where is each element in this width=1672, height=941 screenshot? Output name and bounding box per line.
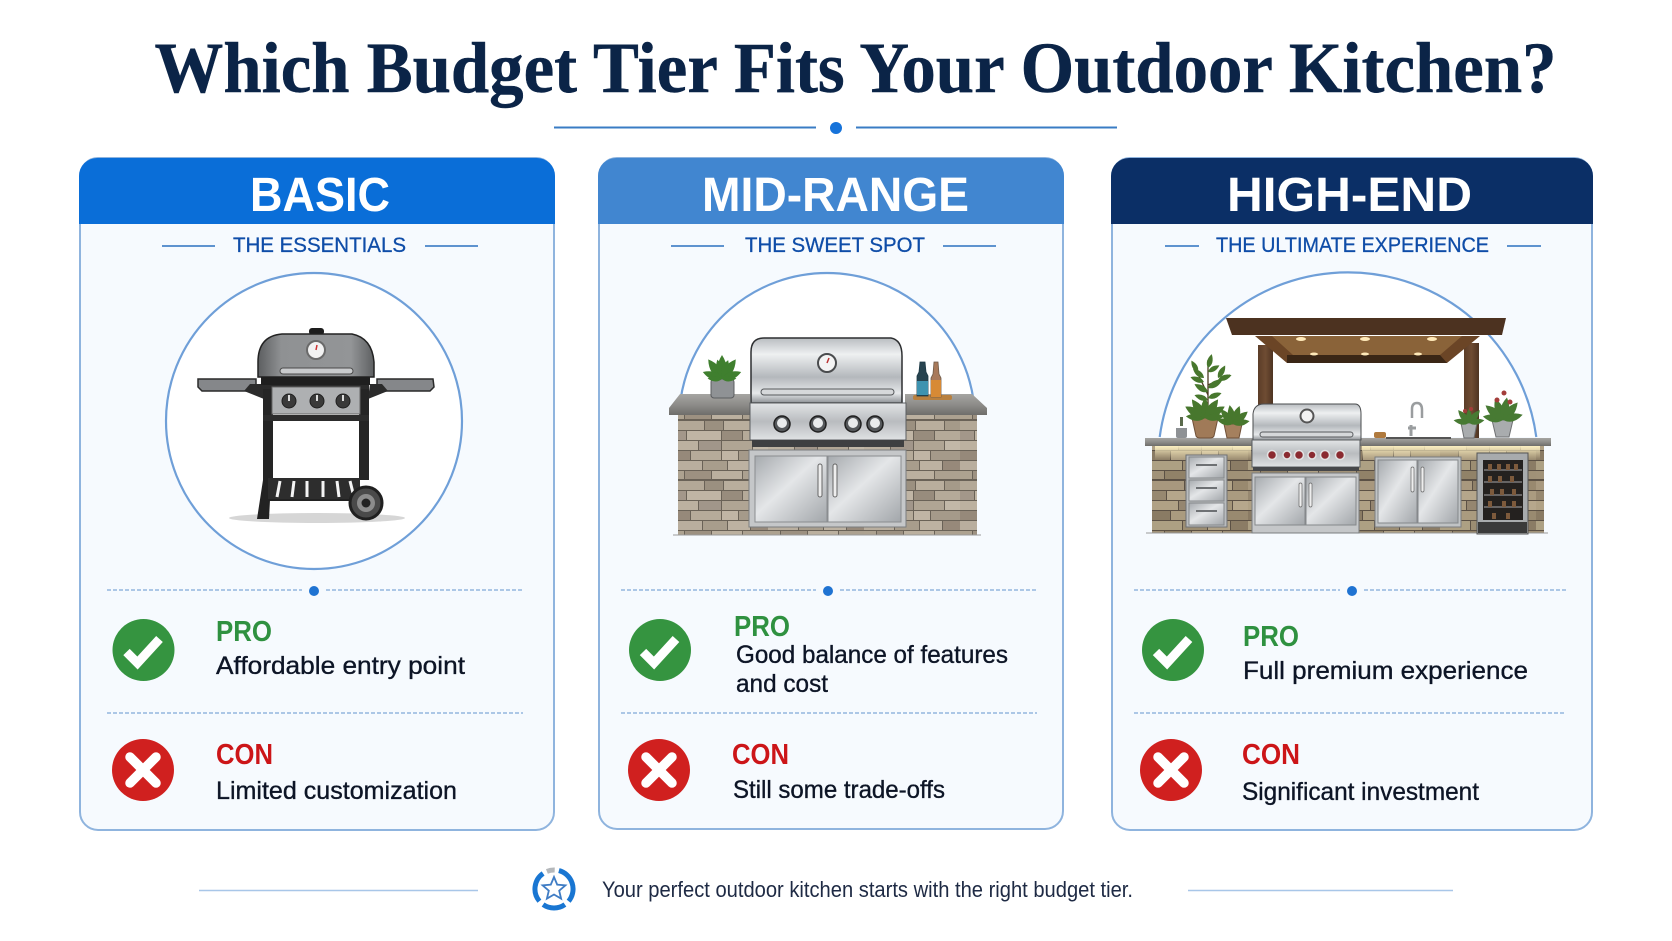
high-end heading: HIGH-END: [1227, 169, 1472, 222]
basic heading: BASIC: [250, 169, 390, 222]
icon: green check: [629, 619, 691, 681]
divider with dot: [107, 586, 523, 596]
mid-range pro: [629, 611, 1008, 698]
high-end pro: PRO: [1243, 621, 1299, 653]
panel: high-end tier: [1111, 158, 1593, 830]
panel: mid-range tier: [598, 158, 1064, 829]
mid-range con: Still some trade-offs: [733, 776, 945, 804]
high-end con: CON: [1242, 739, 1300, 771]
basic con: [112, 739, 457, 805]
panel: basic tier: [79, 158, 555, 830]
basic pro: PRO: [216, 616, 272, 648]
icon: red cross: [1140, 739, 1202, 801]
divider with dot: [1134, 586, 1566, 596]
basic pro: Affordable entry point: [216, 652, 465, 680]
footer tagline: Your perfect outdoor kitchen starts with the right budget tier.: [602, 877, 1133, 902]
basic con: CON: [216, 739, 273, 771]
illustration: built-in grill island: [669, 273, 987, 535]
mid-range header band: [598, 158, 1064, 224]
high-end con: [1140, 739, 1479, 806]
title: Which Budget Tier Fits Your Outdoor Kitchen?: [154, 28, 1556, 108]
high-end con: Significant investment: [1242, 778, 1479, 806]
title divider: [554, 122, 1117, 134]
footer: [199, 870, 1453, 908]
basic pro: [112, 616, 465, 681]
mid-range pro: Good balance of features: [736, 641, 1008, 669]
icon: star in ring: [535, 870, 573, 908]
icon: red cross: [112, 739, 174, 801]
icon: green check: [1142, 619, 1204, 681]
basic con: Limited customization: [216, 777, 457, 805]
high-end pro: Full premium experience: [1243, 657, 1528, 685]
icon: green check: [112, 619, 174, 681]
divider with dot: [621, 586, 1037, 596]
mid-range heading: MID-RANGE: [702, 169, 969, 222]
basic subheading: THE ESSENTIALS: [233, 234, 406, 257]
mid-range pro: PRO: [734, 611, 790, 643]
illustration: freestanding gas grill in circle: [166, 273, 462, 569]
high-end header band: [1111, 158, 1593, 224]
mid-range subheading: THE SWEET SPOT: [745, 234, 925, 257]
illustration: full outdoor kitchen with pergola: [1145, 272, 1551, 534]
mid-range pro: and cost: [736, 670, 828, 698]
high-end pro: [1142, 619, 1528, 685]
mid-range con: CON: [732, 739, 789, 771]
mid-range con: [628, 739, 945, 804]
icon: red cross: [628, 739, 690, 801]
basic header band: [79, 158, 555, 224]
high-end subheading: THE ULTIMATE EXPERIENCE: [1216, 234, 1489, 257]
